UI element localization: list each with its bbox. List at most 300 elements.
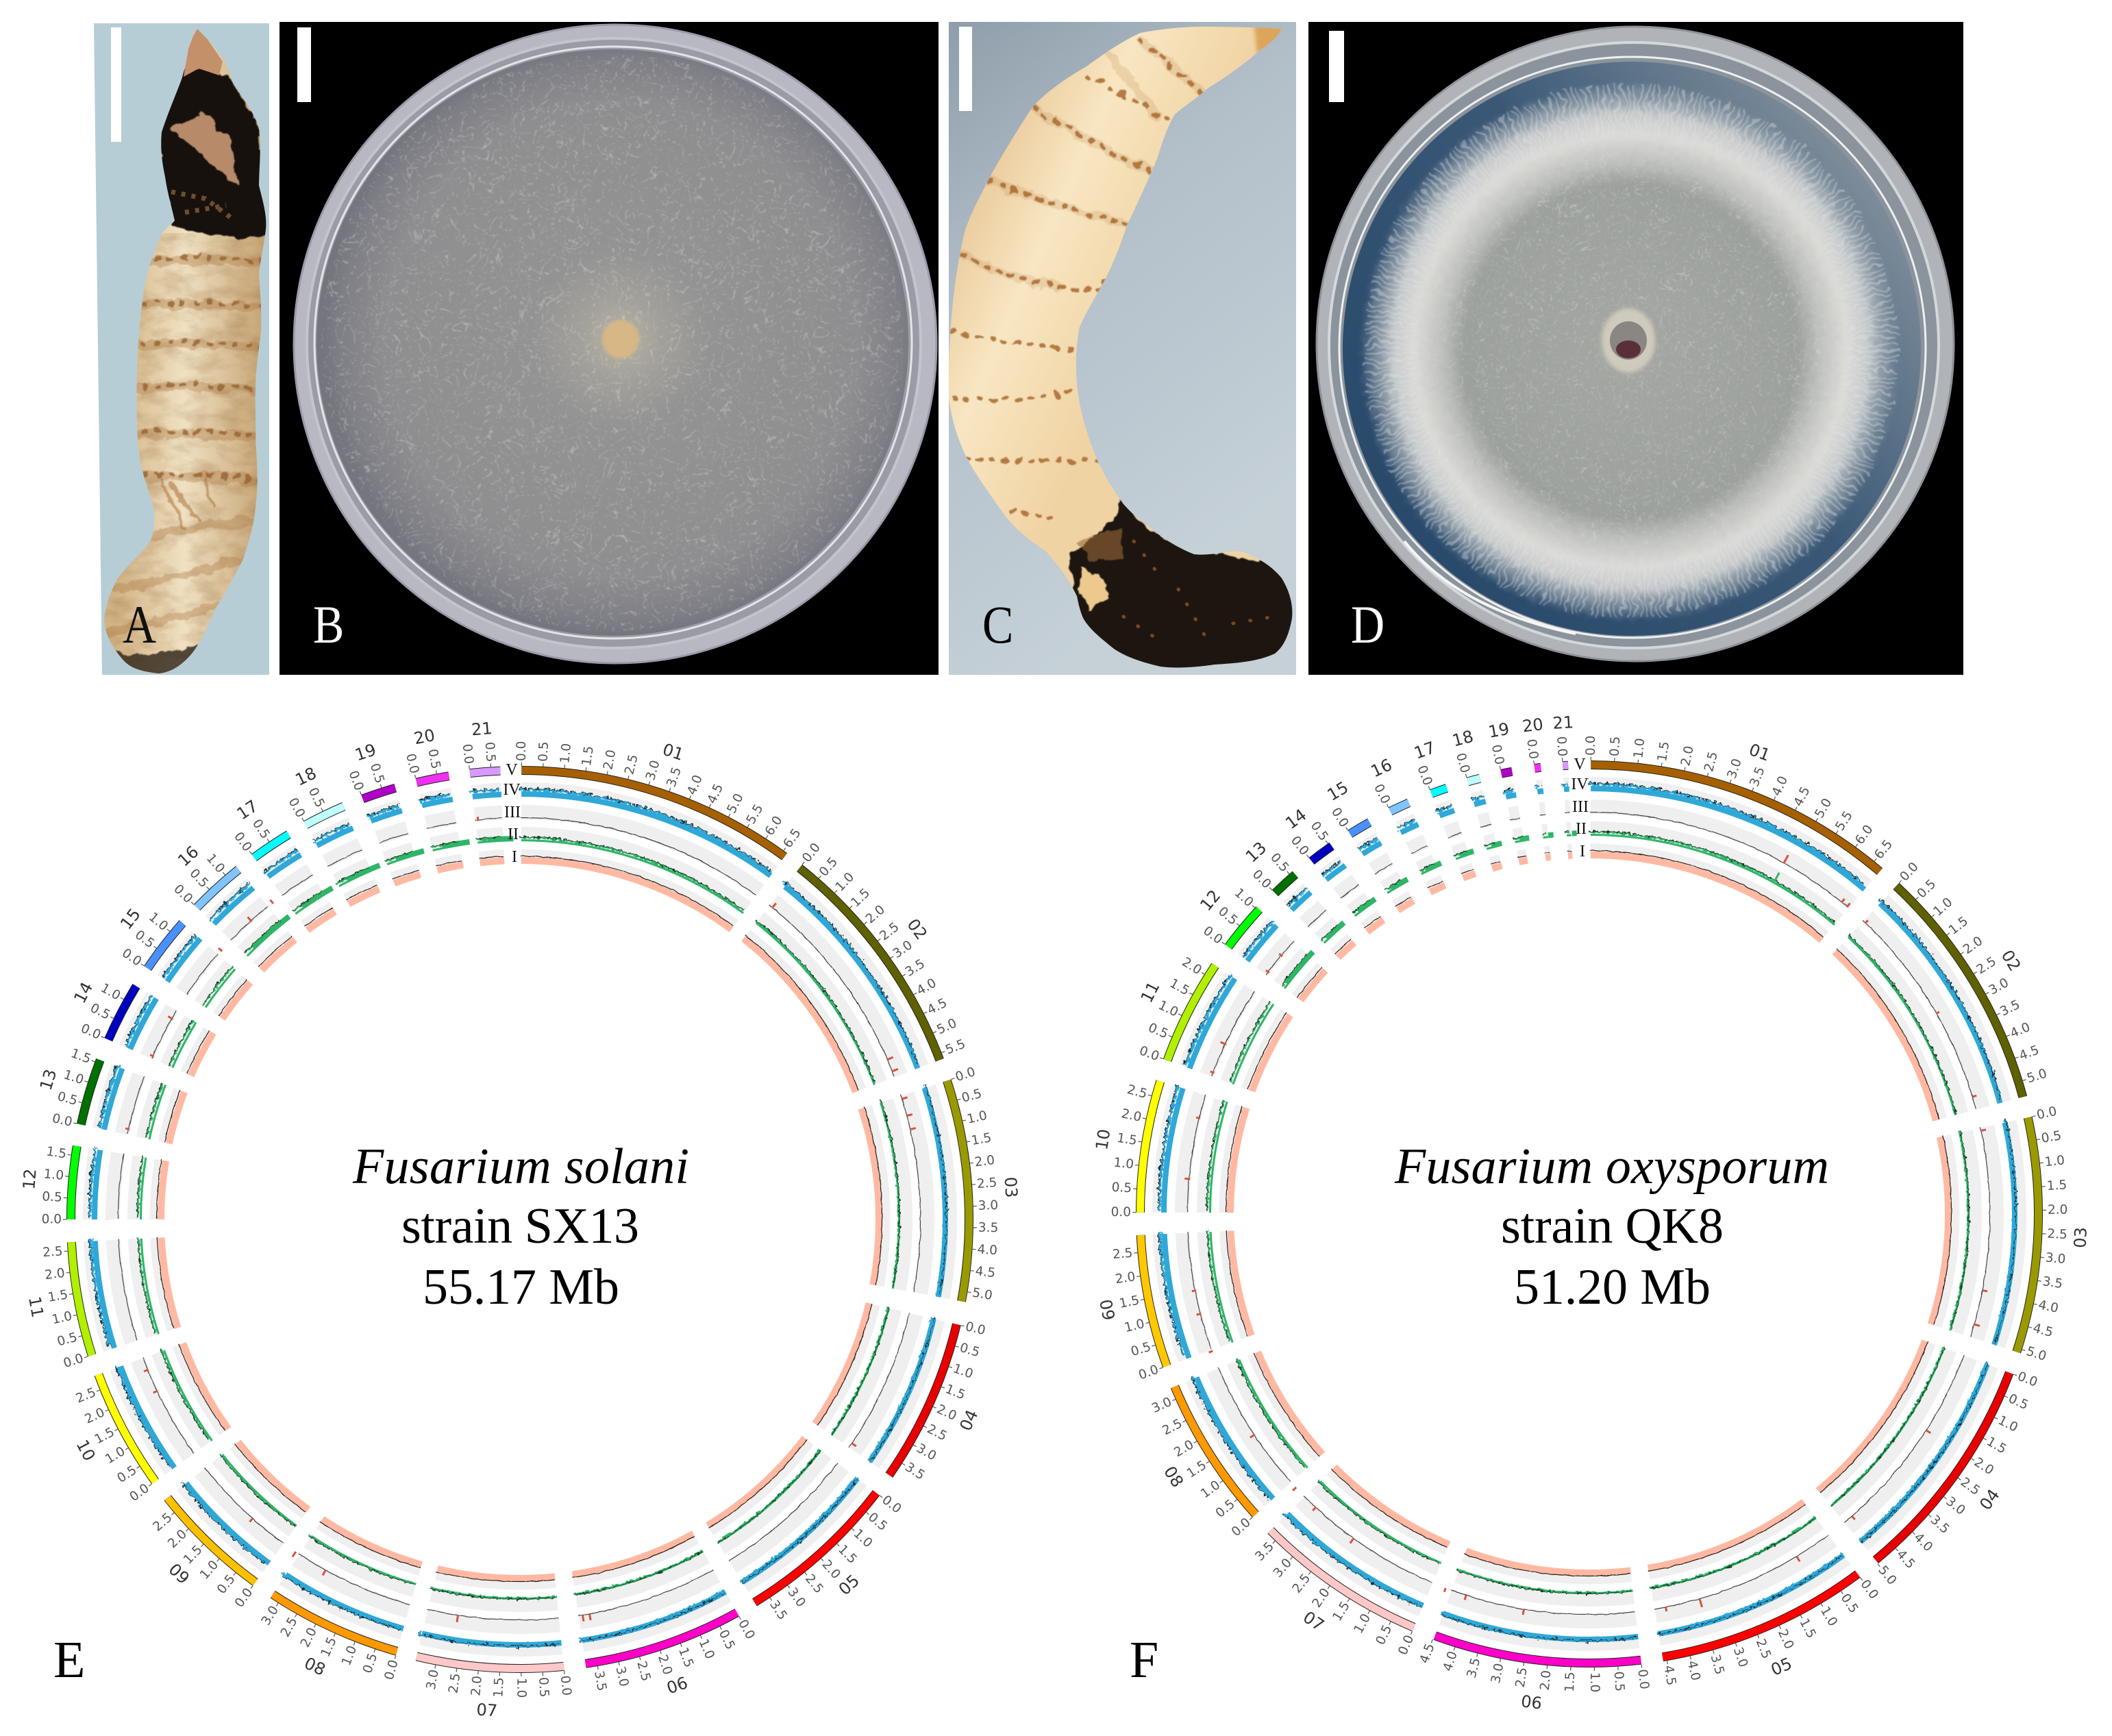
- chromosome 06 F: 0.0: [1635, 1668, 1652, 1690]
- scale bar A: [111, 27, 121, 142]
- chromosome 10 F: 2.0: [1120, 1106, 1143, 1125]
- chromosome 03 E: 2.0: [974, 1153, 995, 1169]
- chromosome 05 E: 0.5: [865, 1510, 890, 1534]
- circular genome plot E: [19, 719, 1045, 1720]
- track numerals E: [503, 761, 521, 866]
- letter D: D: [1351, 595, 1384, 654]
- letter E: E: [53, 1631, 85, 1689]
- chromosome 21 E: 21: [471, 719, 493, 739]
- track numerals F: [1571, 756, 1589, 860]
- chromosome 15 E: 0.0: [119, 946, 144, 969]
- chromosome 21 F: 0.0: [1554, 736, 1569, 757]
- chromosome 06 F: 4.5: [1417, 1641, 1438, 1665]
- chromosome 19 F: [1487, 719, 1512, 773]
- chromosome 03 F: 03: [2070, 1227, 2091, 1248]
- chromosome 04 E: 2.0: [934, 1402, 958, 1424]
- chromosome 07 F: 0.0: [1395, 1633, 1417, 1657]
- chromosome 18 F: 18: [1450, 727, 1476, 751]
- track IV F: [1160, 785, 2018, 1643]
- chromosome 08 E: 2.0: [298, 1626, 320, 1650]
- chromosome 10 F: 1.0: [1113, 1156, 1134, 1172]
- chromosome 20 E: 20: [412, 726, 436, 748]
- rhizome A: [104, 29, 266, 673]
- chromosome 01 E: [514, 740, 804, 856]
- chromosome 11 F: 1.0: [1156, 998, 1180, 1020]
- colony D: [1360, 80, 1901, 621]
- chromosome 09 F: 1.5: [1118, 1293, 1141, 1311]
- chromosome 14 E: 0.0: [79, 1021, 103, 1043]
- letter C: C: [982, 595, 1013, 654]
- chromosome 05 F: 0.5: [1838, 1591, 1861, 1616]
- species title F: 51.20 Mb: [1514, 1259, 1711, 1315]
- chromosome 09 E: [142, 1498, 267, 1611]
- chromosome 12 E: [19, 1144, 77, 1226]
- chromosome 08 E: [253, 1594, 408, 1682]
- panel A background: [94, 23, 269, 675]
- outer ideogram outline E: [71, 770, 969, 1669]
- chromosome 11 E: 2.0: [44, 1266, 66, 1282]
- chromosome 09 F: 0.0: [1136, 1363, 1160, 1382]
- panel E: circos plot of Fusarium solani SX13: [19, 719, 1045, 1720]
- chromosome 04 F: 5.0: [1875, 1563, 1899, 1588]
- chromosome 13 F: 0.5: [1267, 850, 1291, 875]
- chromosome 02 F: 5.0: [2025, 1067, 2049, 1086]
- chromosome 06 E: 1.0: [696, 1637, 717, 1661]
- panel C: diseased rhizome photo: [945, 21, 1302, 678]
- chromosome 03 F: 1.5: [2046, 1178, 2067, 1193]
- chromosome 15 E: 15: [116, 905, 145, 933]
- chromosome 08 E: 3.0: [259, 1603, 282, 1628]
- chromosome 06 F: [1415, 1612, 1652, 1715]
- chromosome 01 E: 4.5: [705, 782, 726, 806]
- chromosome 17 E: 17: [234, 796, 262, 823]
- chromosome 08 E: 1.0: [339, 1644, 360, 1667]
- chromosome 17 F: 17: [1412, 738, 1438, 763]
- chromosome 05 F: 1.0: [1817, 1604, 1840, 1629]
- chromosome 02 E: 4.5: [925, 995, 949, 1017]
- chromosome 06 E: 1.5: [675, 1646, 696, 1670]
- chromosome 02 F: 3.5: [1998, 997, 2022, 1019]
- chromosome 02 F: 4.5: [2017, 1043, 2041, 1063]
- chromosome 03 E: 3.5: [978, 1221, 998, 1235]
- chromosome 01 F: 4.5: [1791, 784, 1813, 809]
- species title F: Fusarium oxysporum: [1394, 1139, 1829, 1195]
- chromosome 10 E: 2.0: [83, 1405, 107, 1427]
- chromosome 18 E: 18: [293, 763, 319, 790]
- chromosome 03 F: 2.5: [2047, 1227, 2067, 1242]
- chromosome 07 F: [1239, 1530, 1431, 1657]
- scale bar B: [297, 27, 311, 102]
- radial hyphae D: [1389, 110, 1872, 592]
- chromosome 17 E: 0.5: [249, 817, 273, 841]
- chromosome 02 E: 1.5: [848, 886, 873, 910]
- species title E: strain SX13: [401, 1198, 639, 1254]
- chromosome 02 F: 4.0: [2008, 1020, 2033, 1041]
- chromosome 10 F: [1092, 1081, 1160, 1219]
- dish highlight D: [1404, 541, 1576, 634]
- chromosome 09 E: 2.5: [151, 1511, 175, 1535]
- chromosome 01 E: 1.5: [580, 745, 597, 767]
- chromosome 07 F: 3.5: [1252, 1539, 1277, 1564]
- chromosome 08 E: 2.5: [278, 1615, 301, 1639]
- chromosome 08 F: 0.0: [1229, 1515, 1254, 1539]
- chromosome 07 F: 2.0: [1310, 1586, 1333, 1611]
- chromosome 04 F: 1.0: [1996, 1413, 2020, 1435]
- chromosome 11 F: 11: [1137, 978, 1164, 1006]
- chromosome 08 E: 0.5: [360, 1652, 380, 1675]
- chromosome 02 F: 2.0: [1961, 934, 1985, 957]
- chromosome 01 E: 0.0: [514, 741, 529, 761]
- chromosome 04 F: [1868, 1345, 2039, 1611]
- chromosome 06 E: 2.5: [634, 1660, 653, 1683]
- chromosome 04 E: 1.5: [943, 1382, 967, 1403]
- chromosome 07 E: 1.0: [514, 1678, 528, 1698]
- chromosome 10 F: 2.5: [1126, 1082, 1149, 1102]
- chromosome 08 F: 0.5: [1213, 1497, 1238, 1521]
- chromosome 07 E: 0.0: [558, 1675, 574, 1696]
- scale bar C: [959, 27, 972, 111]
- chromosome 09 F: [1095, 1235, 1186, 1382]
- chromosome 13 E: 0.0: [51, 1111, 73, 1130]
- chromosome 10 F: 0.5: [1111, 1180, 1132, 1195]
- species title E: 55.17 Mb: [423, 1259, 619, 1315]
- species title F: strain QK8: [1501, 1198, 1724, 1254]
- chromosome 05 E: 3.5: [767, 1598, 790, 1622]
- chromosome 04 F: 0.5: [2006, 1391, 2030, 1413]
- chromosome 01 F: 1.0: [1631, 737, 1648, 759]
- chromosome 02 E: 2.5: [877, 920, 902, 943]
- chromosome 03 E: 4.0: [977, 1242, 998, 1258]
- chromosome 16 E: 1.0: [203, 852, 227, 876]
- chromosome 13 E: 0.5: [55, 1089, 79, 1108]
- chromosome 05 E: 1.5: [835, 1542, 860, 1567]
- chromosome 02 E: 3.5: [903, 956, 928, 980]
- chromosome 08 F: 2.0: [1171, 1437, 1196, 1460]
- chromosome 14 F: 14: [1282, 805, 1310, 833]
- chromosome 02 F: 3.0: [1987, 976, 2011, 998]
- chromosome 01 E: 6.0: [762, 814, 786, 839]
- chromosome 03 F: 5.0: [2024, 1344, 2048, 1364]
- chromosome 17 F: 0.0: [1414, 764, 1434, 787]
- chromosome 07 F: 1.0: [1352, 1611, 1374, 1636]
- chromosome 21 F: 21: [1552, 712, 1574, 733]
- chromosome 06 F: 1.0: [1587, 1672, 1602, 1692]
- petri dish B rim: [294, 25, 936, 663]
- chromosome 06 F: 2.0: [1538, 1670, 1554, 1691]
- chromosome 02 F: 02: [1998, 947, 2024, 975]
- chromosome 03 E: 1.0: [966, 1108, 989, 1127]
- chromosome 04 E: 04: [956, 1407, 982, 1434]
- track II F: [1208, 833, 1970, 1595]
- chromosome 05 F: 2.0: [1775, 1627, 1796, 1652]
- chromosome 19 E: [346, 740, 395, 800]
- chromosome 01 F: 4.0: [1769, 774, 1791, 798]
- chromosome 06 F: 3.5: [1465, 1657, 1483, 1679]
- track III F: [1184, 813, 1991, 1615]
- chromosome 20 F: 0.0: [1524, 739, 1541, 760]
- chromosome 18 F: [1450, 727, 1480, 782]
- chromosome 10 E: 1.0: [103, 1444, 127, 1467]
- track numerals E: IV: [503, 781, 521, 799]
- chromosome 07 E: 1.5: [491, 1677, 507, 1698]
- chromosome 06 F: 0.5: [1611, 1671, 1627, 1692]
- chromosome 16 F: 0.0: [1371, 782, 1393, 806]
- chromosome 19 F: 0.0: [1489, 743, 1506, 766]
- chromosome 02 F: [1850, 860, 2094, 1097]
- chromosome 03 E: 03: [1000, 1176, 1021, 1198]
- mycelium texture D: [1411, 130, 1850, 569]
- chromosome 01 E: 1.0: [558, 743, 574, 764]
- chromosome 20 E: [403, 726, 449, 784]
- chromosome 12 F: 0.0: [1200, 923, 1225, 947]
- chromosome 06 F: 06: [1520, 1691, 1543, 1713]
- chromosome 08 F: [1131, 1387, 1275, 1539]
- chromosome 15 E: [116, 905, 183, 974]
- chromosome 01 E: 6.5: [781, 826, 804, 851]
- chromosome 08 F: 1.0: [1198, 1478, 1223, 1501]
- panel D background: [1308, 22, 1963, 675]
- chromosome 07 F: 0.5: [1374, 1623, 1395, 1647]
- chromosome 07 E: [417, 1642, 574, 1720]
- chromosome 07 F: 2.5: [1290, 1571, 1313, 1596]
- species title E: [352, 1139, 689, 1315]
- chromosome 01 F: 6.5: [1872, 837, 1896, 862]
- chromosome 14 F: 0.5: [1308, 819, 1331, 844]
- chromosome 16 F: 16: [1368, 755, 1395, 781]
- panel A: diseased rhizome photo: [94, 21, 274, 678]
- chromosome 20 E: 0.5: [425, 748, 443, 770]
- chromosome 07 E: 2.5: [446, 1672, 463, 1694]
- chromosome 10 F: 0.0: [1111, 1205, 1131, 1219]
- chromosome 10 E: 2.5: [74, 1385, 98, 1406]
- chromosome 01 F: [1583, 736, 1896, 871]
- chromosome 21 F: [1552, 712, 1574, 766]
- chromosome 01 E: 5.0: [725, 791, 747, 816]
- chromosome 21 E: 0.5: [482, 741, 498, 762]
- chromosome 19 E: 0.0: [346, 769, 367, 793]
- chromosome 03 E: 0.5: [960, 1087, 983, 1106]
- chromosome 10 E: [62, 1374, 169, 1504]
- chromosome 01 F: 0.5: [1608, 736, 1623, 757]
- chromosome 02 F: 0.0: [1897, 860, 1922, 884]
- chromosome 06 E: 0.5: [716, 1628, 738, 1652]
- chromosome 03 F: 2.0: [2048, 1203, 2067, 1217]
- chromosome 05 F: [1651, 1532, 1881, 1731]
- chromosome 02 F: 0.5: [1915, 877, 1939, 902]
- chromosome 03 E: 4.5: [975, 1264, 996, 1280]
- chromosome 12 F: 1.0: [1232, 886, 1256, 910]
- chromosome 07 E: 2.0: [469, 1675, 485, 1696]
- chromosome 18 E: 0.5: [306, 786, 327, 810]
- chromosome 11 E: 0.5: [55, 1330, 79, 1349]
- chromosome 03 E: 2.5: [976, 1176, 997, 1191]
- chromosome 02 E: 0.5: [817, 855, 841, 880]
- chromosome 05 F: 3.5: [1708, 1653, 1727, 1676]
- chromosome 03 E: [895, 1065, 1045, 1310]
- rhizome C: [945, 21, 1302, 678]
- chromosome 01 F: 2.0: [1678, 745, 1697, 767]
- chromosome 04 F: 0.0: [2015, 1369, 2039, 1390]
- chromosome 05 E: [755, 1474, 904, 1640]
- chromosome 05 F: 05: [1768, 1654, 1795, 1680]
- chromosome 18 E: [286, 763, 344, 826]
- chromosome 04 E: 0.5: [958, 1341, 982, 1360]
- chromosome 04 F: 3.5: [1928, 1513, 1952, 1537]
- chromosome 03 F: [1968, 1104, 2109, 1369]
- grey track bands E: [90, 789, 949, 1650]
- chromosome 02 F: 1.5: [1946, 914, 1971, 938]
- chromosome 08 F: 1.5: [1184, 1458, 1209, 1481]
- track numerals F: I: [1580, 843, 1585, 860]
- chromosome 11 E: [25, 1239, 106, 1371]
- letter F: F: [1130, 1631, 1158, 1689]
- chromosome 08 F: 2.5: [1160, 1416, 1184, 1439]
- chromosome 13 E: 1.5: [69, 1046, 92, 1067]
- chromosome 08 F: 08: [1160, 1463, 1187, 1491]
- chromosome 06 E: 3.0: [612, 1665, 631, 1688]
- chromosome 03 F: 4.0: [2037, 1298, 2060, 1316]
- inoculum plug B: [602, 320, 639, 358]
- chromosome 13 F: 13: [1242, 838, 1270, 867]
- chromosome 09 F: 2.0: [1115, 1269, 1136, 1287]
- chromosome 16 E: 0.0: [171, 882, 195, 906]
- grey track bands F: [1159, 784, 2020, 1644]
- chromosome 16 E: 0.5: [187, 866, 211, 891]
- chromosome 08 E: 0.0: [382, 1659, 401, 1682]
- chromosome 11 F: 1.5: [1167, 976, 1192, 998]
- track numerals E: III: [504, 804, 521, 821]
- chromosome 10 E: 0.0: [127, 1481, 152, 1504]
- chromosome 16 E: 16: [174, 842, 203, 870]
- chromosome 07 F: 1.5: [1330, 1599, 1353, 1624]
- chromosome 01 E: 2.5: [622, 753, 641, 776]
- chromosome 05 F: 4.5: [1661, 1664, 1678, 1687]
- chromosome 14 E: 1.0: [98, 981, 123, 1003]
- chromosome 03 F: 4.5: [2031, 1321, 2054, 1340]
- chromosome 09 F: 0.5: [1129, 1340, 1153, 1359]
- track numerals F: III: [1572, 798, 1589, 816]
- panel D: Fusarium oxysporum culture plate: [1308, 22, 1963, 675]
- chromosome 08 E: 1.5: [319, 1635, 340, 1659]
- species title E: Fusarium solani: [352, 1139, 689, 1195]
- chromosome 05 E: 0.0: [879, 1493, 904, 1517]
- chromosome 18 F: 0.0: [1453, 752, 1472, 775]
- chromosome 02 E: 4.0: [915, 976, 939, 998]
- chromosome 07 E: 0.5: [536, 1677, 551, 1698]
- chromosome 15 F: 0.0: [1328, 805, 1351, 830]
- track numerals E: V: [506, 761, 518, 779]
- chromosome 10 E: 10: [73, 1437, 99, 1464]
- chromosome 01 E: 2.0: [601, 749, 619, 771]
- chromosome 01 F: 3.0: [1725, 757, 1745, 780]
- chromosome 02 E: 5.5: [943, 1037, 967, 1058]
- chromosome 21 E: [460, 719, 500, 774]
- chromosome 02 E: 1.0: [833, 870, 857, 895]
- chromosome 10 E: 1.5: [92, 1425, 117, 1447]
- chromosome 05 E: 05: [835, 1571, 863, 1599]
- panel B: Fusarium solani culture plate: [279, 22, 939, 675]
- chromosome 04 E: 0.0: [964, 1319, 987, 1338]
- chromosome 14 F: 0.0: [1288, 834, 1312, 858]
- chromosome 04 F: 3.0: [1943, 1494, 1968, 1518]
- chromosome 10 F: 1.5: [1116, 1131, 1138, 1148]
- track numerals F: II: [1576, 820, 1587, 838]
- chromosome 15 E: 1.0: [146, 910, 171, 934]
- chromosome 02 E: [757, 841, 1010, 1067]
- chromosome 15 F: [1324, 778, 1369, 834]
- chromosome 20 F: [1521, 715, 1544, 768]
- chromosome 04 E: 1.0: [951, 1361, 975, 1382]
- chromosome 12 E: 1.5: [45, 1144, 67, 1161]
- chromosome 17 E: [231, 796, 288, 859]
- chromosome 13 E: 13: [36, 1067, 60, 1093]
- chromosome 12 E: 0.5: [42, 1189, 62, 1205]
- chromosome 07 E: 07: [476, 1700, 498, 1720]
- chromosome 04 F: 1.5: [1984, 1435, 2009, 1457]
- chromosome 09 E: 2.0: [165, 1527, 190, 1551]
- chromosome 01 E: 01: [660, 740, 686, 765]
- agar B: [316, 49, 908, 636]
- chromosome 07 E: 3.0: [424, 1668, 442, 1691]
- track I F: [1226, 851, 1952, 1577]
- chromosome 20 F: 20: [1521, 715, 1544, 736]
- letter A: A: [123, 595, 156, 654]
- chromosome 06 E: 06: [664, 1673, 691, 1698]
- chromosome 02 E: 0.0: [799, 841, 823, 865]
- chromosome 03 E: 1.5: [970, 1130, 993, 1148]
- chromosome 05 F: 4.0: [1685, 1659, 1703, 1682]
- chromosome 12 E: 12: [19, 1168, 40, 1191]
- chromosome 05 F: 3.0: [1730, 1646, 1750, 1669]
- chromosome 09 E: 0.0: [232, 1585, 256, 1611]
- track numerals F: V: [1574, 756, 1586, 773]
- chromosome 04 F: 4.5: [1893, 1547, 1917, 1572]
- chromosome 11 F: 0.5: [1146, 1021, 1170, 1041]
- panel C background: [949, 22, 1296, 675]
- chromosome 13 E: 1.0: [62, 1067, 86, 1087]
- necrotic black base: [1068, 499, 1292, 667]
- outer ideogram outline F: [1140, 765, 2039, 1663]
- chromosome 06 F: 2.5: [1513, 1666, 1530, 1689]
- track numerals F: IV: [1571, 776, 1589, 793]
- chromosome 14 E: 14: [70, 979, 97, 1006]
- chromosome 09 F: 09: [1095, 1298, 1119, 1322]
- track III E: [119, 817, 921, 1622]
- chromosome 15 F: 15: [1324, 778, 1352, 805]
- chromosome 02 E: 3.0: [891, 938, 915, 961]
- track I E: [158, 856, 882, 1583]
- chromosome 05 F: 0.0: [1857, 1577, 1881, 1602]
- chromosome 17 F: [1412, 738, 1447, 794]
- chromosome 12 F: 0.5: [1215, 904, 1240, 928]
- chromosome 13 F: 0.0: [1250, 867, 1274, 891]
- chromosome 04 E: 3.0: [914, 1441, 939, 1463]
- chromosome 11 E: 1.5: [47, 1287, 69, 1305]
- chromosome 03 E: 0.0: [954, 1065, 977, 1084]
- chromosome 02 E: 2.0: [863, 902, 888, 926]
- chromosome 04 E: [889, 1312, 987, 1489]
- chromosome 21 E: 0.0: [460, 743, 476, 765]
- chromosome 09 E: 0.5: [214, 1572, 238, 1597]
- chromosome 11 E: 2.5: [42, 1244, 63, 1260]
- chromosome 10 F: 10: [1092, 1128, 1114, 1152]
- chromosome 04 F: 2.0: [1972, 1455, 1996, 1478]
- chromosome 13 E: [36, 1045, 100, 1132]
- chromosome 06 F: 3.0: [1489, 1662, 1506, 1685]
- inoculum plug D: [1602, 308, 1655, 373]
- chromosome 15 E: 0.5: [132, 928, 157, 951]
- chromosome 14 F: [1282, 805, 1334, 863]
